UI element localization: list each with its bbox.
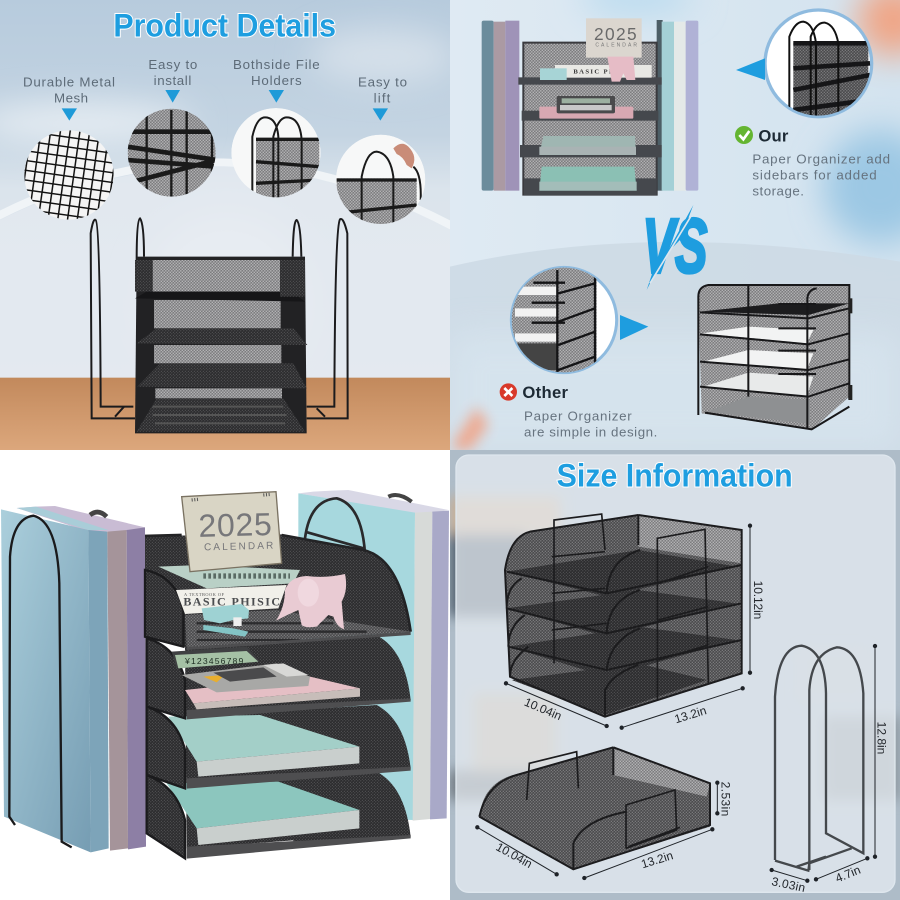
tier 4 right wall — [293, 772, 411, 845]
heading: our: Our — [758, 126, 789, 145]
item: calculator: ¥123456789 — [184, 656, 244, 666]
grey book — [413, 512, 432, 821]
shelf front edges — [187, 632, 411, 650]
mesh body — [523, 43, 657, 195]
mauve book — [107, 530, 128, 851]
stacked trays — [505, 514, 742, 717]
left books — [482, 21, 494, 191]
heading: other: Other — [522, 383, 569, 402]
item: basic physics book — [176, 585, 287, 614]
central back mesh — [185, 640, 298, 848]
panel: product scene — [1, 490, 449, 860]
dimension labels: 2.53in — [718, 782, 732, 816]
item: desk calendar: 2025 — [198, 506, 272, 544]
label: durable metal mesh: Durable Metal — [23, 75, 115, 90]
background shapes — [450, 497, 900, 800]
paper shelves — [700, 303, 849, 315]
wood floor — [0, 378, 450, 450]
dimension labels: 3.03in — [770, 874, 807, 895]
lower curved band — [450, 242, 900, 450]
books on top shelf — [555, 65, 652, 78]
white arc — [0, 162, 453, 227]
dimension labels: 12.8in — [874, 722, 888, 754]
vs graphic — [643, 204, 707, 290]
our description — [752, 152, 890, 199]
outline frame — [505, 515, 742, 717]
dimension labels: 10.04in — [522, 695, 564, 723]
dimension labels: 13.2in — [639, 848, 675, 871]
our organizer with sidebars: BASIC PHISIC — [573, 69, 634, 76]
tier left walls — [145, 570, 183, 647]
label: easy to lift: lift — [374, 91, 391, 106]
arch sidebar — [775, 646, 863, 871]
circle: metal mesh — [24, 130, 114, 220]
purple book — [127, 527, 146, 849]
label: easy to lift — [358, 75, 407, 106]
tier 1 back and right wall — [145, 534, 411, 647]
frame lines — [698, 285, 849, 429]
item: stapler — [202, 604, 249, 637]
circle: file holders detail — [231, 108, 321, 200]
panel: comparison — [450, 0, 900, 450]
our description: storage. — [752, 184, 804, 199]
label: bothside file holders — [233, 57, 320, 88]
pink elephant — [607, 57, 635, 82]
dimension lines — [476, 524, 877, 882]
other description: are simple in design. — [524, 424, 657, 439]
panel: product details — [0, 0, 450, 450]
dimension labels — [494, 581, 888, 895]
back mesh panels — [153, 260, 282, 398]
panel: size information — [450, 450, 900, 900]
spine — [88, 530, 109, 852]
mint book — [298, 493, 415, 820]
top pages — [17, 506, 145, 532]
calendar — [586, 18, 642, 58]
pointer arrows — [62, 90, 388, 121]
organizer wires — [91, 218, 348, 418]
our description: sidebars for added — [752, 168, 877, 183]
tier 1 floor — [185, 610, 411, 647]
item: desk calendar — [182, 492, 282, 572]
title: Size Information — [557, 458, 793, 494]
label: durable metal mesh: Mesh — [54, 91, 88, 106]
info card — [456, 455, 895, 892]
four tier organizer — [135, 257, 307, 433]
item: notebook — [158, 565, 300, 588]
lavender book — [430, 511, 449, 819]
teal book tier 3 — [168, 715, 359, 762]
dimension labels: 13.2in — [673, 703, 708, 726]
our organizer with sidebars: CALENDAR — [595, 43, 637, 49]
dimension labels: 4.7in — [833, 863, 863, 885]
other description: Paper Organizer — [524, 408, 632, 423]
label: easy to install — [148, 57, 197, 88]
tier floors — [507, 550, 737, 597]
calculator and pink pad — [539, 107, 633, 119]
other description — [524, 408, 657, 439]
colour blobs — [580, 0, 900, 243]
item: desk calendar: CALENDAR — [204, 541, 273, 553]
right books — [657, 20, 663, 191]
label: bothside file holders: Bothside File — [233, 57, 320, 72]
right book group — [298, 490, 449, 821]
white background — [0, 450, 450, 900]
item: pink elephant — [276, 574, 346, 629]
far hook — [90, 512, 107, 517]
teal book tier 4 — [167, 782, 359, 828]
arch wire — [9, 516, 72, 847]
orange accent — [453, 407, 488, 450]
side walls — [135, 260, 305, 297]
dimension labels: 10.04in — [494, 840, 535, 871]
tier 3 right wall — [293, 705, 411, 777]
check icon — [735, 126, 753, 144]
clouds — [0, 30, 457, 387]
label: bothside file holders: Holders — [251, 73, 302, 88]
arrow to our circle — [736, 58, 765, 80]
far hook — [388, 495, 412, 502]
arrow from other circle — [620, 315, 648, 340]
dimension labels: 10.12in — [751, 581, 765, 619]
vs graphic: VS — [643, 204, 707, 290]
zoom circle: other — [511, 267, 617, 373]
label: easy to lift: Easy to — [358, 75, 407, 90]
zoom circle: our sidebars — [765, 10, 872, 119]
item: pink pad — [185, 677, 360, 709]
label: easy to install: install — [154, 73, 191, 88]
our organizer with sidebars — [482, 18, 698, 195]
item: basic physics book: A TEXTBOOK OF — [184, 592, 225, 597]
single tray — [479, 747, 710, 869]
label: easy to install: Easy to — [148, 57, 197, 72]
shelves — [518, 77, 662, 195]
title: Product Details — [113, 8, 336, 44]
top pages — [298, 490, 448, 513]
wall lower band — [0, 167, 450, 380]
circle: install detail — [127, 109, 217, 197]
item: calculator — [172, 647, 310, 692]
item: basic physics book: BASIC PHISIC — [183, 594, 280, 608]
label: durable metal mesh — [23, 75, 115, 106]
other organizer — [698, 285, 852, 430]
tier 2 right wall — [293, 635, 411, 708]
circle: lift detail — [336, 135, 425, 225]
background wall — [0, 0, 450, 450]
teal books — [539, 136, 636, 155]
blurred background — [450, 450, 900, 900]
arch wire — [305, 498, 365, 553]
our description: Paper Organizer add — [752, 152, 890, 167]
left book group — [1, 506, 146, 852]
organizer trays — [145, 534, 411, 859]
front cover — [1, 509, 91, 852]
background — [450, 0, 900, 450]
shelves — [135, 292, 305, 302]
x icon — [500, 383, 517, 401]
divider wires — [552, 514, 708, 700]
our organizer with sidebars: 2025 — [594, 24, 637, 44]
